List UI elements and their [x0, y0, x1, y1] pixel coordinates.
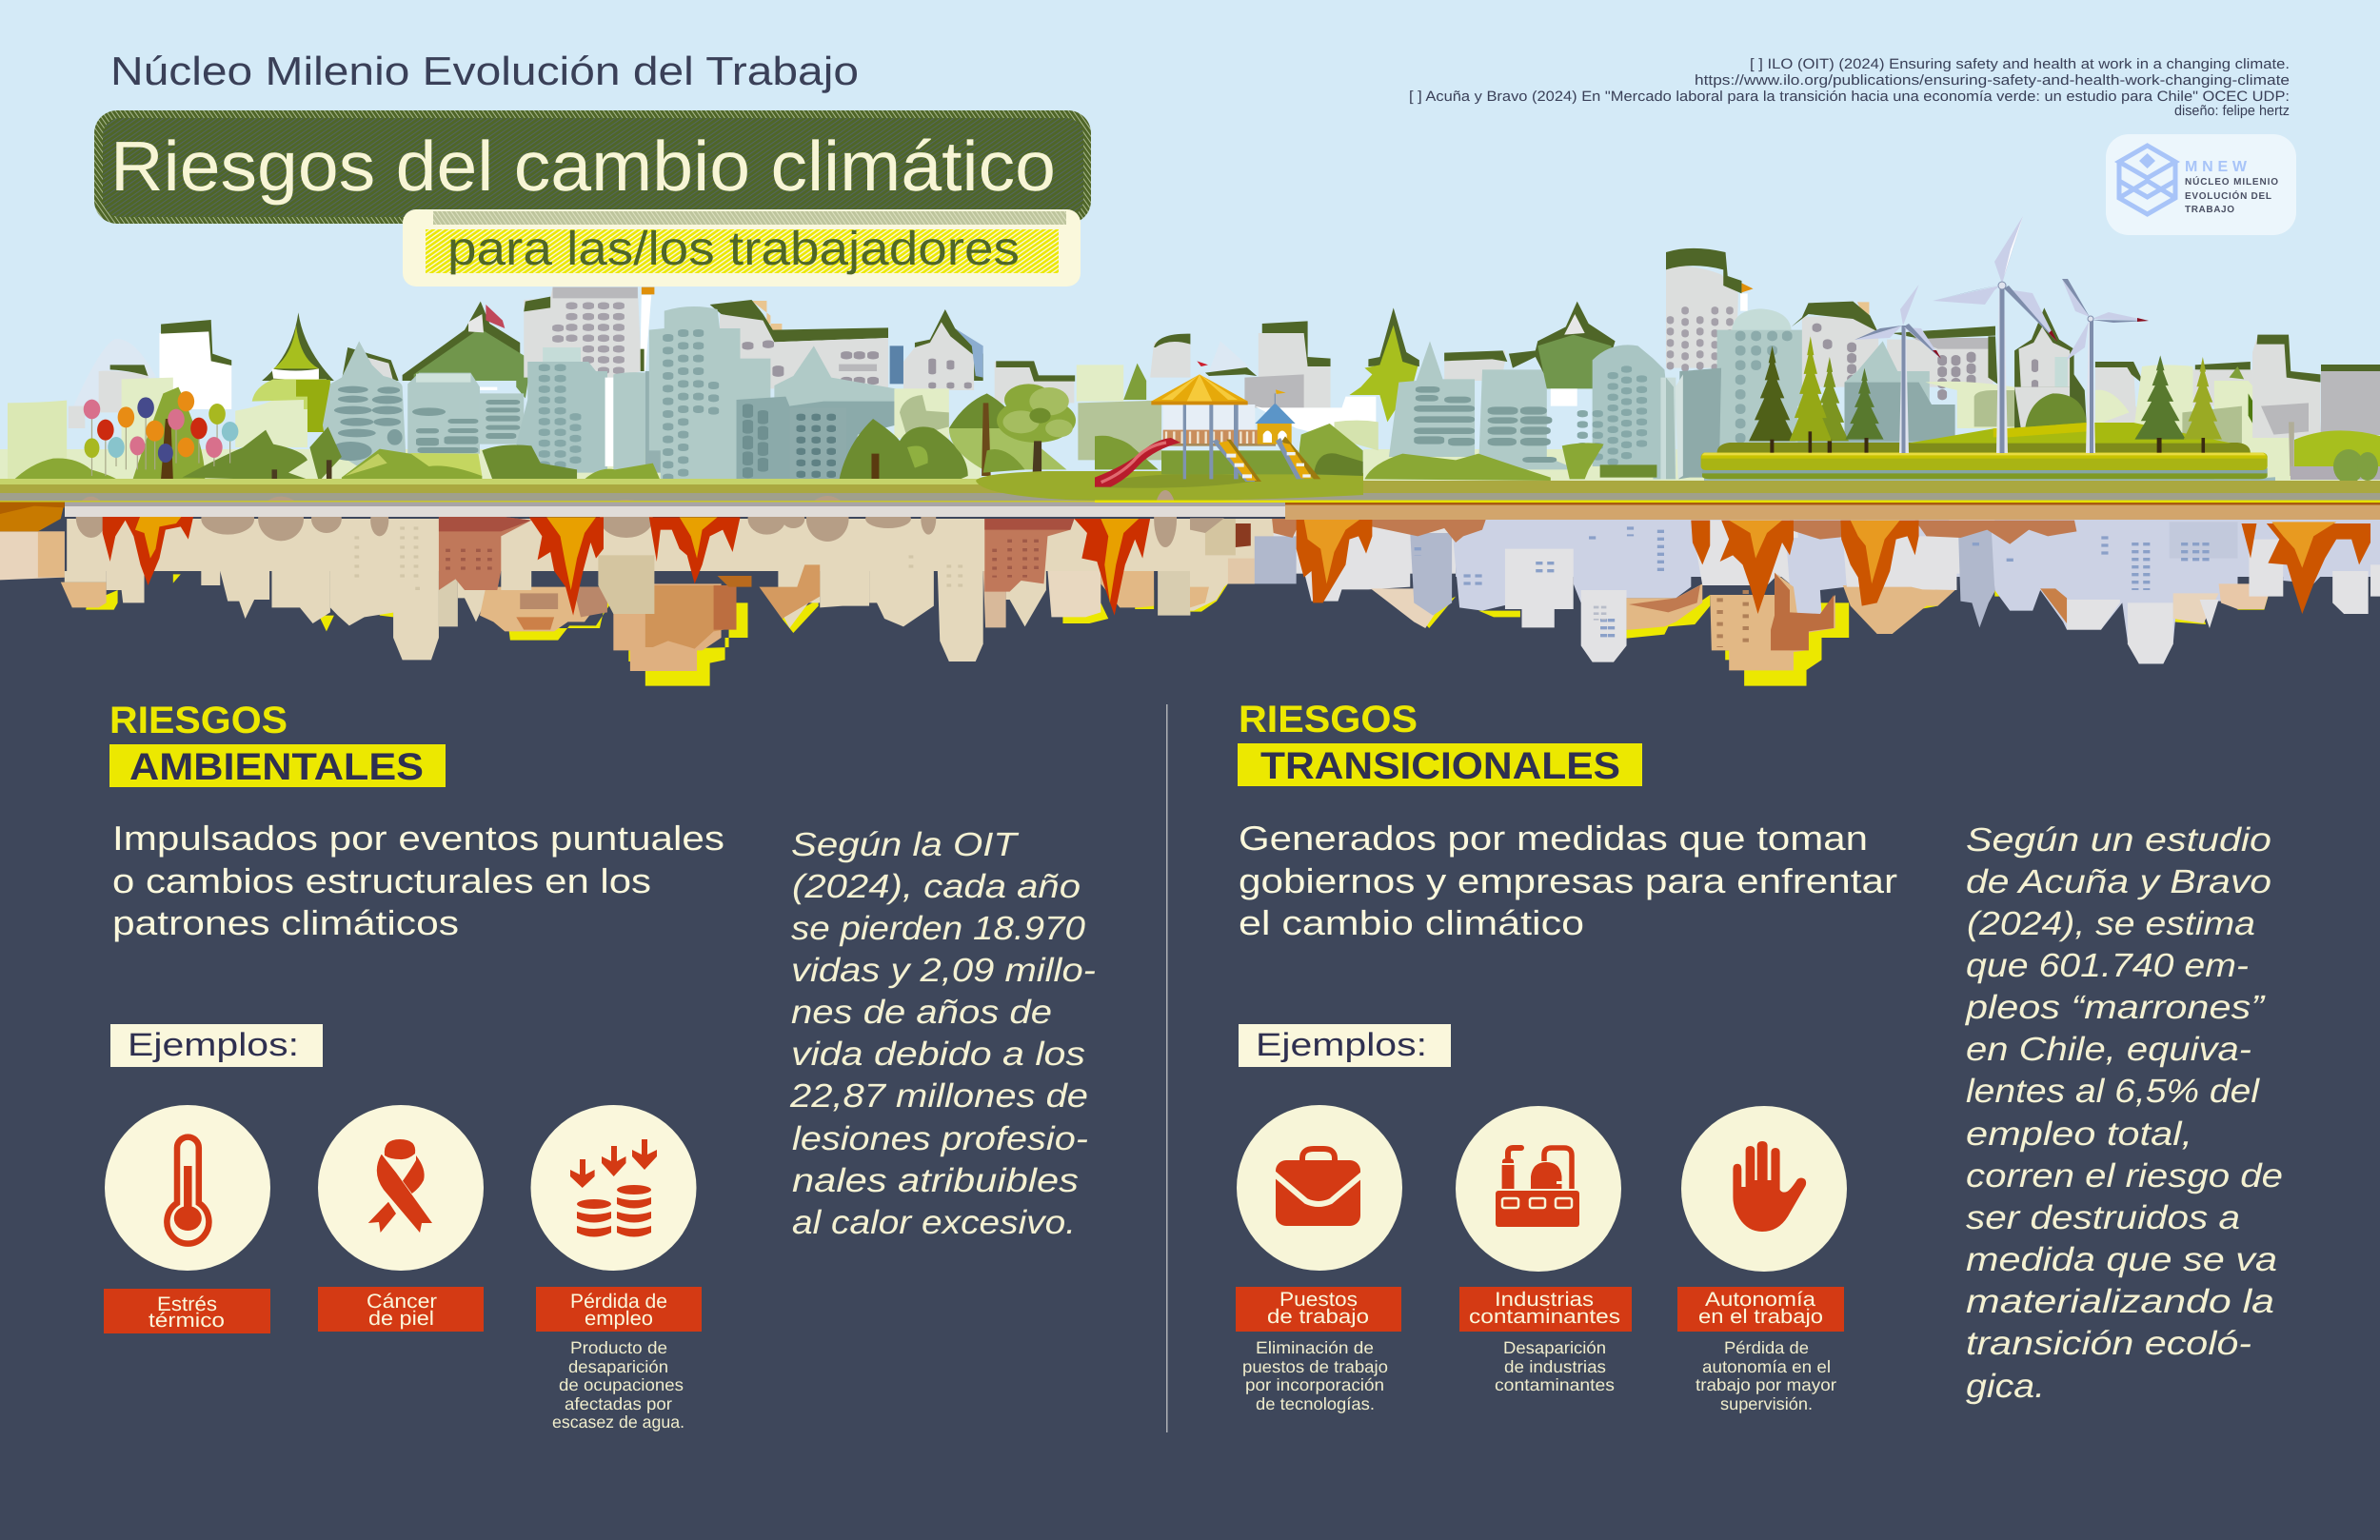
example: puestos de trabajo: por incorporación	[1245, 1375, 1384, 1394]
statistic OIT: vida debido a los	[791, 1036, 1085, 1073]
yellow shadows	[86, 574, 1154, 686]
statistic OIT: Según la OIT	[791, 826, 1020, 863]
pine trees	[1749, 336, 2222, 453]
logo MNEW: MNEW	[2185, 159, 2248, 175]
title banner	[94, 110, 1091, 224]
dark lower background	[0, 502, 2380, 1540]
example: pérdida de empleo	[531, 1105, 702, 1431]
turbine 3	[2062, 279, 2149, 453]
example: industrias contaminantes: Industrias	[1495, 1289, 1594, 1311]
references: [ ] ILO (OIT) (2024) Ensuring safety and health at work in a changing climate.	[1750, 56, 2290, 72]
description transicionales: el cambio climático	[1239, 903, 1584, 942]
statistic Acuña y Bravo	[1965, 821, 2283, 1405]
ejemplos label: Ejemplos:	[1256, 1027, 1427, 1063]
brown arches	[1272, 519, 2076, 544]
example: pérdida de empleo: Producto de	[570, 1338, 667, 1357]
playground	[976, 361, 1363, 501]
statistic Acuña y Bravo: ser destruidos a	[1966, 1199, 2240, 1236]
example: puestos de trabajo: de tecnologías.	[1256, 1394, 1375, 1413]
description transicionales: Generados por medidas que toman	[1239, 819, 1868, 858]
example: estrés térmico	[104, 1105, 270, 1333]
road edge strips	[0, 501, 2380, 520]
icon: factory	[1496, 1148, 1579, 1227]
icon: thermometer	[167, 1137, 208, 1244]
logo MNEW: NÚCLEO MILENIO	[2185, 176, 2278, 188]
statistic Acuña y Bravo: medida que se va	[1966, 1241, 2277, 1278]
statistic Acuña y Bravo: lentes al 6,5% del	[1966, 1073, 2260, 1110]
heading ambientales: AMBIENTALES	[129, 746, 424, 788]
heading ambientales: RIESGOS	[109, 700, 288, 741]
example: autonomía en el trabajo: Pérdida de	[1724, 1338, 1809, 1357]
far right buildings and bushes	[2291, 365, 2380, 484]
example: estrés térmico: Estrés	[157, 1293, 217, 1315]
example: pérdida de empleo: escasez de agua.	[552, 1412, 684, 1431]
references: [ ] Acuña y Bravo (2024) En "Mercado laboral para la transición hacia una economía verde: un estudio para Chile" OCEC UDP:	[1409, 89, 2290, 105]
description ambientales: patrones climáticos	[112, 903, 459, 942]
yellow shadows	[1190, 583, 2268, 686]
example: autonomía en el trabajo: en el trabajo	[1698, 1306, 1823, 1328]
flames	[1297, 519, 2370, 614]
description ambientales: Impulsados por eventos puntuales	[112, 819, 724, 858]
example: puestos de trabajo: puestos de trabajo	[1242, 1357, 1388, 1376]
heading transicionales: TRANSICIONALES	[1260, 745, 1620, 787]
example: autonomía en el trabajo: trabajo por mayor	[1696, 1375, 1836, 1394]
example: pérdida de empleo: desaparición	[568, 1357, 668, 1376]
subtitle banner	[403, 209, 1081, 286]
logo MNEW: EVOLUCIÓN DEL	[2185, 190, 2271, 202]
statistic Acuña y Bravo: que 601.740 em-	[1966, 947, 2249, 984]
statistic OIT: vidas y 2,09 millo-	[791, 952, 1096, 989]
icon: briefcase	[1274, 1149, 1362, 1226]
statistic OIT: lesiones profesio-	[792, 1120, 1088, 1157]
example: estrés térmico: térmico	[149, 1310, 225, 1332]
skyline right section, buildings behind turbines	[1666, 248, 2332, 479]
example: puestos de trabajo: Puestos	[1279, 1289, 1358, 1311]
reflected burning city, right half	[1190, 518, 2380, 686]
example: pérdida de empleo: Pérdida de	[570, 1291, 667, 1313]
statistic OIT: nes de años de	[791, 994, 1052, 1031]
example: cáncer de piel: Cáncer	[367, 1291, 437, 1313]
organisation name: Núcleo Milenio Evolución del Trabajo	[110, 49, 859, 93]
subtitle banner: para las/los trabajadores	[447, 222, 1020, 275]
statistic Acuña y Bravo: transición ecoló-	[1966, 1325, 2251, 1362]
sky background	[0, 0, 2380, 514]
statistic OIT: 22,87 millones de	[789, 1077, 1088, 1115]
references: https://www.ilo.org/publications/ensuring-safety-and-health-work-changing-climate	[1695, 72, 2290, 89]
statistic OIT: (2024), cada año	[792, 868, 1081, 905]
heading ambientales	[109, 700, 446, 788]
flames	[103, 516, 1150, 616]
left orange corner	[0, 503, 65, 531]
example: puestos de trabajo: de trabajo	[1267, 1306, 1369, 1328]
skyline right half	[1190, 302, 1729, 488]
statistic Acuña y Bravo: Según un estudio	[1966, 821, 2271, 859]
example: industrias contaminantes: contaminantes	[1469, 1306, 1620, 1328]
example: cáncer de piel: de piel	[368, 1308, 434, 1330]
example: pérdida de empleo: afectadas por	[565, 1394, 672, 1413]
icon: raised hand	[1733, 1141, 1806, 1232]
references	[1409, 56, 2290, 119]
wind turbines	[1854, 216, 2149, 453]
example: autonomía en el trabajo: autonomía en el	[1702, 1357, 1831, 1376]
statistic Acuña y Bravo: gica.	[1966, 1368, 2045, 1405]
description ambientales	[112, 819, 724, 942]
statistic OIT: nales atribuibles	[792, 1162, 1079, 1199]
statistic Acuña y Bravo: de Acuña y Bravo	[1966, 863, 2271, 900]
panel: riesgos transicionales	[1236, 699, 2283, 1413]
ejemplos label	[1239, 1024, 1451, 1067]
references: diseño: felipe hertz	[2174, 103, 2290, 119]
description transicionales	[1239, 819, 1897, 942]
icon: ribbon	[368, 1139, 432, 1233]
logo MNEW: TRABAJO	[2185, 205, 2234, 215]
reflected burning city, left half	[0, 490, 1190, 686]
panel: riesgos ambientales	[104, 700, 1096, 1431]
example: industrias contaminantes	[1456, 1106, 1632, 1394]
turbine 1	[1854, 285, 1941, 453]
reflected base walls	[1266, 520, 2380, 577]
statistic OIT	[789, 826, 1096, 1241]
statistic Acuña y Bravo: materializando la	[1966, 1283, 2274, 1320]
turbine 2	[1933, 216, 2057, 453]
statistic Acuña y Bravo: (2024), se estima	[1967, 905, 2255, 942]
skyline left half	[8, 287, 1190, 483]
example: industrias contaminantes: Desaparición	[1503, 1338, 1606, 1357]
example: autonomía en el trabajo	[1677, 1106, 1847, 1413]
heading transicionales: RIESGOS	[1239, 699, 1418, 740]
example: pérdida de empleo: de ocupaciones	[559, 1375, 684, 1394]
statistic Acuña y Bravo: pleos “marrones”	[1965, 989, 2266, 1026]
statistic OIT: al calor excesivo.	[792, 1204, 1076, 1241]
example: cáncer de piel	[318, 1105, 484, 1332]
example: autonomía en el trabajo: supervisión.	[1720, 1394, 1813, 1413]
balloons	[84, 391, 238, 476]
example: puestos de trabajo	[1236, 1105, 1402, 1413]
title banner: Riesgos del cambio climático	[110, 127, 1056, 206]
example: autonomía en el trabajo: Autonomía	[1705, 1289, 1815, 1311]
statistic Acuña y Bravo: empleo total,	[1966, 1116, 2192, 1153]
platform with hill	[1701, 336, 2268, 479]
description transicionales: gobiernos y empresas para enfrentar	[1239, 861, 1897, 900]
road and ground	[0, 479, 2380, 502]
playground ground	[976, 471, 1363, 501]
tree by the playground	[997, 384, 1076, 476]
statistic Acuña y Bravo: en Chile, equiva-	[1966, 1031, 2251, 1068]
example: pérdida de empleo: empleo	[585, 1308, 653, 1330]
heading transicionales	[1238, 699, 1642, 787]
example: industrias contaminantes: de industrias	[1504, 1357, 1606, 1376]
statistic Acuña y Bravo: corren el riesgo de	[1966, 1157, 2283, 1194]
pale backdrop behind the lower skyline	[0, 440, 2380, 484]
logo mark	[2119, 146, 2175, 214]
ejemplos label	[110, 1024, 323, 1067]
statistic OIT: se pierden 18.970	[791, 910, 1086, 947]
example: puestos de trabajo: Eliminación de	[1256, 1338, 1374, 1357]
central divider	[1166, 704, 1167, 1432]
ejemplos label: Ejemplos:	[128, 1027, 299, 1063]
description ambientales: o cambios estructurales en los	[112, 861, 651, 900]
logo MNEW	[2106, 134, 2296, 235]
example: industrias contaminantes: contaminantes	[1495, 1375, 1615, 1394]
icon: falling coins	[570, 1139, 657, 1237]
